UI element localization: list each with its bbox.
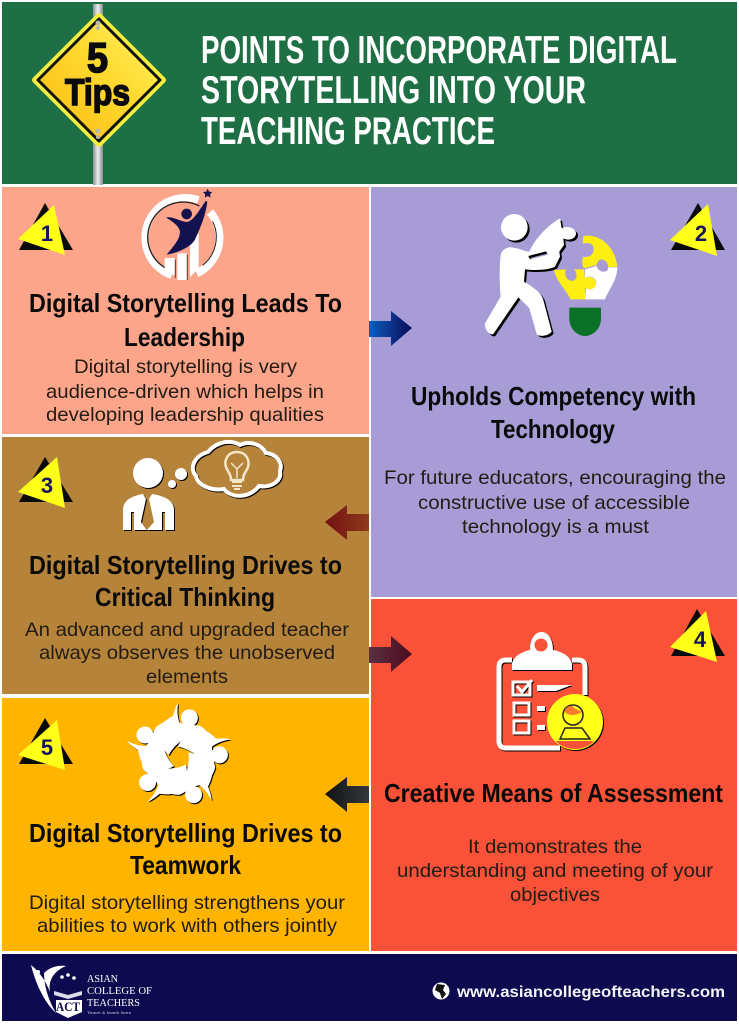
title	[201, 29, 677, 153]
body text: elements	[146, 666, 228, 688]
badge 4	[670, 609, 725, 662]
arrow: panel 1 to panel 2	[369, 311, 412, 346]
arrow: panel 2 to panel 3	[325, 505, 369, 540]
panel 3: critical thinking	[2, 437, 369, 694]
body text: understanding and meeting of your	[397, 860, 714, 882]
badge 3: 3	[41, 473, 53, 498]
logo: Asian College of Teachers	[31, 965, 152, 1018]
arrow: panel 3 to panel 4	[369, 636, 412, 672]
body text	[25, 619, 350, 688]
heading: Upholds Competency with	[411, 381, 696, 411]
icon: 5 tips road sign: 5	[87, 34, 108, 81]
body text: It demonstrates the	[468, 836, 642, 858]
heading: Digital Storytelling Leads To	[29, 288, 342, 318]
heading: Critical Thinking	[95, 582, 275, 612]
logo: Asian College of Teachers: ASIAN	[87, 974, 118, 985]
logo: Asian College of Teachers: Teach & teach lives	[87, 1010, 131, 1015]
title: STORYTELLING INTO YOUR	[201, 69, 586, 112]
badge 2: 2	[695, 221, 707, 246]
heading	[29, 550, 342, 612]
body text: Digital storytelling is very	[74, 356, 297, 378]
body text: always observes the unobserved	[39, 642, 335, 664]
icon: globe	[432, 982, 450, 1000]
heading	[411, 381, 696, 444]
panel 2: technology	[371, 187, 737, 597]
header panel	[2, 2, 737, 185]
arrow: panel 4 to panel 5	[325, 777, 369, 812]
title: TEACHING PRACTICE	[201, 110, 495, 153]
icon: 5 tips road sign	[35, 4, 163, 185]
logo: Asian College of Teachers: ACT	[56, 999, 80, 1014]
icon: person placing puzzle in light bulb	[485, 214, 617, 336]
heading: Digital Storytelling Drives to	[29, 818, 342, 848]
footer	[2, 954, 737, 1021]
body text	[29, 892, 346, 937]
body text	[397, 836, 714, 906]
body text: For future educators, encouraging the	[384, 467, 726, 489]
heading: Digital Storytelling Drives to	[29, 550, 342, 580]
heading: Technology	[491, 414, 615, 444]
heading	[29, 288, 342, 352]
logo: Asian College of Teachers: TEACHERS	[87, 998, 140, 1009]
badge 1: 1	[41, 221, 53, 246]
icon: thinking man with bulb cloud	[123, 442, 281, 530]
website URL: www.asiancollegeofteachers.com	[456, 984, 725, 1001]
badge 5	[18, 718, 73, 770]
body text: developing leadership qualities	[46, 404, 324, 426]
body text: constructive use of accessible	[418, 492, 690, 514]
heading: Teamwork	[130, 850, 241, 880]
panel 1: leadership	[2, 187, 369, 434]
body text: Digital storytelling strengthens your	[29, 892, 346, 914]
body text: audience-driven which helps in	[46, 381, 324, 403]
icon: clipboard with checklist and person	[499, 632, 603, 750]
panel 5: teamwork	[2, 696, 369, 951]
badge 4: 4	[694, 627, 707, 652]
badge 5: 5	[41, 735, 53, 760]
icon: 5 tips road sign: Tips	[65, 72, 130, 113]
heading	[29, 818, 342, 880]
body text: technology is a must	[462, 516, 650, 538]
logo: Asian College of Teachers: COLLEGE OF	[87, 986, 152, 997]
body text	[46, 356, 324, 426]
badge 1	[18, 203, 73, 255]
icon: five people circle	[127, 696, 243, 817]
body text	[384, 467, 726, 538]
body text: abilities to work with others jointly	[37, 915, 337, 937]
body text: objectives	[510, 884, 600, 906]
icon: leadership figure in ring	[145, 189, 219, 280]
heading: Leadership	[124, 322, 245, 352]
badge 3	[18, 457, 73, 508]
badge 2	[670, 203, 725, 256]
body text: An advanced and upgraded teacher	[25, 619, 350, 641]
panel 4: assessment	[371, 599, 737, 951]
